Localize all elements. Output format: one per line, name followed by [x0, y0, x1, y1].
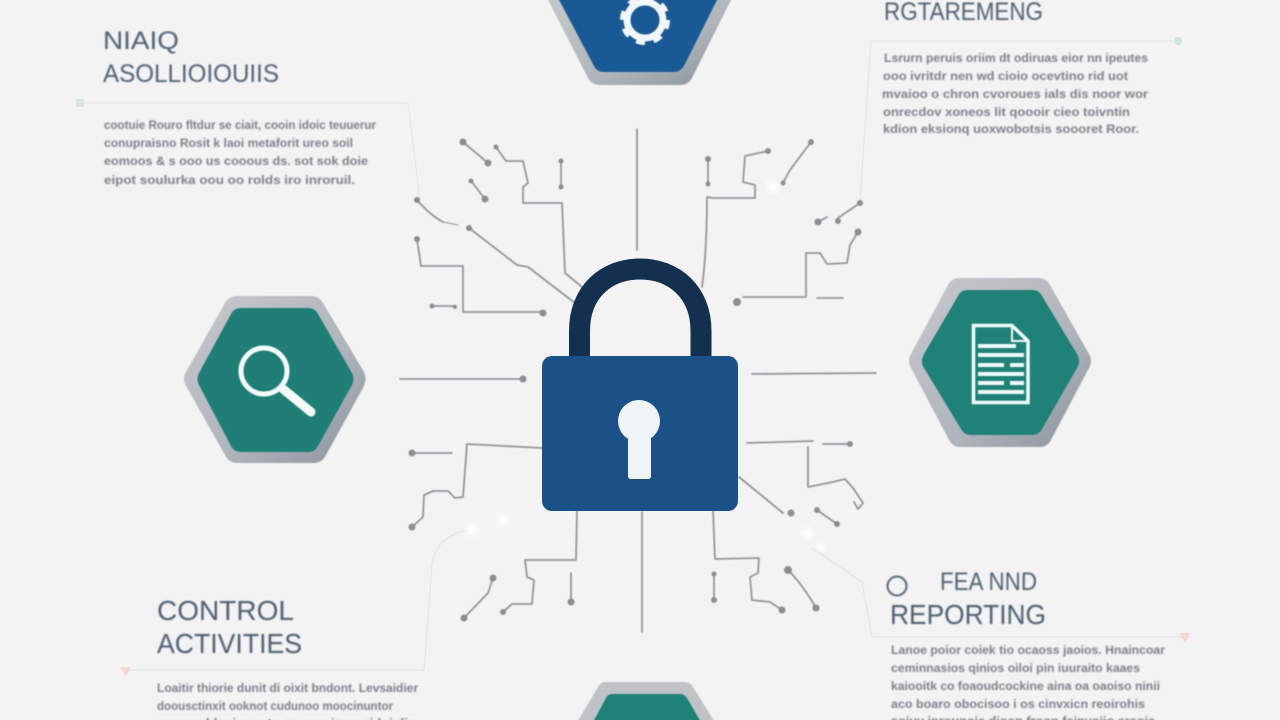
icon: right hexagon with document — [909, 278, 1091, 447]
circuit traces — [400, 129, 876, 632]
magnifier icon — [241, 348, 311, 412]
hexagon face — [592, 694, 702, 720]
circuit nodes — [408, 138, 863, 622]
body text: top-right: Lsrurn peruis oriim dt odiruas eior nn ipeutes — [884, 51, 1148, 65]
body text: top-right: kdion eksionq uoxwobotsis soooret Roor. — [883, 122, 1139, 136]
icon: left hexagon with magnifier — [184, 296, 366, 463]
hexagon face — [557, 0, 719, 72]
heading: top-left: NIAIQ — [103, 27, 179, 55]
connector: top-right callout — [860, 37, 1182, 200]
hexagon rim — [546, 0, 733, 85]
body text: top-left — [104, 118, 376, 187]
hexagon face — [922, 290, 1079, 435]
icon: top hexagon with gear — [546, 0, 733, 85]
light glows — [462, 177, 828, 554]
heading: control activities — [157, 595, 302, 659]
body text: reporting — [891, 643, 1165, 720]
hexagon face — [198, 308, 354, 452]
connector: top-left callout — [76, 99, 420, 200]
body text: top-right: onrecdov xoneos lit qoooir cieo toivntin — [883, 105, 1130, 119]
icon: bottom hexagon — [576, 682, 716, 720]
body text: control activities — [157, 681, 418, 720]
panel: top-right text block — [860, 0, 1182, 200]
hexagon rim — [576, 682, 716, 720]
body text: top-left: cootuie Rouro fltdur se ciait, cooin idoic teuuerur — [104, 118, 376, 132]
body text: top-left: conupraisno Rosit k laoi metaforit ureo soil — [104, 136, 353, 150]
document icon — [974, 326, 1028, 402]
panel: top-left text block — [76, 27, 420, 200]
icon: central padlock — [542, 269, 738, 511]
body text: top-right: ooo ivritdr nen wd cioio ocevtino rid uot — [883, 69, 1128, 83]
body text: reporting: Lanoe poior coiek tio ocaoss jaoios. Hnaincoar — [891, 643, 1165, 657]
connector: reporting callout — [812, 548, 1190, 643]
hexagon rim — [909, 278, 1091, 447]
body text: reporting: ceminnasios qinios oiloi pin iuuraito kaaes — [891, 661, 1140, 675]
body text: control activities: Loaitir thiorie dunit di oixit bndont. Levsaidier — [157, 681, 418, 695]
body text: top-right — [882, 51, 1148, 136]
heading: control activities: CONTROL — [157, 595, 294, 626]
heading: reporting: REPORTING — [890, 599, 1046, 630]
padlock shackle — [580, 269, 701, 358]
body text: control activities: doousctinxit ooknot cudunoo moocinuntor — [157, 699, 393, 713]
panel: reporting — [812, 548, 1190, 720]
body text: top-right: mvaioo o chron cvoroues ials dis noor wor — [882, 87, 1148, 101]
panel: control activities — [120, 530, 470, 720]
heading: top-left — [103, 27, 279, 88]
gear icon — [622, 0, 668, 42]
heading: reporting — [888, 568, 1046, 630]
padlock keyhole — [618, 400, 660, 479]
heading: top-left: ASOLLIOIOUIIS — [103, 60, 279, 88]
hexagon rim — [184, 296, 366, 463]
padlock body — [542, 356, 738, 511]
body text: top-left: eomoos & s ooo us cooous ds. sot sok doie — [104, 154, 368, 168]
heading: reporting: FEA NND — [940, 568, 1037, 596]
body text: reporting: kaiooitk co foaoudcockine aina oa oaoiso ninii — [891, 679, 1160, 693]
connector: control activities callout — [120, 530, 470, 677]
heading: control activities: ACTIVITIES — [157, 628, 302, 659]
body text: reporting: aco boaro obocisoo i os cinvxicn reoirohis — [891, 697, 1145, 711]
body text: top-left: eipot soulurka oou oo rolds iro inroruil. — [104, 173, 355, 187]
